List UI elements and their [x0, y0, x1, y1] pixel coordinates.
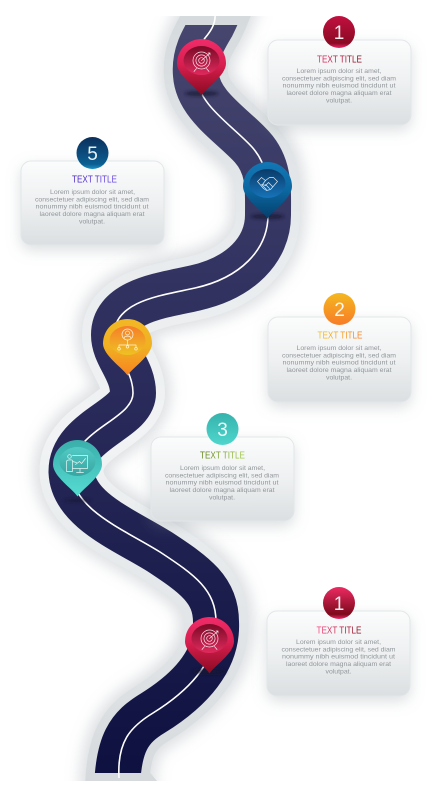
icon: target lower [201, 630, 218, 650]
card 5 body: consectetuer adipiscing elit, sed diam [35, 197, 149, 203]
card 1 lower body: nonummy nibh euismod tincidunt ut [282, 655, 395, 661]
card 5 body: volutpat. [79, 219, 105, 225]
card 1 lower [267, 587, 410, 696]
card 5 [21, 137, 164, 245]
card 3 body: volutpat. [209, 495, 235, 501]
card 3 body: consectetuer adipiscing elit, sed diam [165, 473, 279, 479]
pin 5: target lower [185, 617, 234, 674]
card 3 body: nonummy nibh euismod tincidunt ut [166, 481, 279, 487]
card 1 lower body: Lorem ipsum dolor sit amet, [296, 640, 381, 646]
pin 3: org chart [103, 319, 152, 376]
card 1 body: Lorem ipsum dolor sit amet, [296, 69, 382, 75]
card 2 title: TEXT TITLE [318, 330, 363, 342]
card 1 lower title: TEXT TITLE [316, 626, 362, 636]
card 1 lower body: laoreet dolore magna aliquam erat [286, 662, 391, 668]
badge 1 lower: 1 [334, 594, 344, 615]
badge 3 [206, 413, 238, 445]
card 1 body: consectetuer adipiscing elit, sed diam [282, 76, 396, 82]
card 1 [268, 16, 411, 125]
card 1 title: TEXT TITLE [317, 54, 362, 66]
badge 5 [76, 137, 108, 169]
card 3 body: Lorem ipsum dolor sit amet, [180, 466, 265, 472]
card 2 body: laoreet dolore magna aliquam erat [286, 368, 392, 374]
badge 1: 1 [334, 23, 344, 44]
card 3 body [165, 466, 279, 501]
pin 4: presentation [53, 440, 102, 502]
card 5 body: laoreet dolore magna aliquam erat [40, 212, 145, 218]
card 2 body: consectetuer adipiscing elit, sed diam [282, 353, 396, 359]
card 3 title: TEXT TITLE [200, 450, 245, 462]
card 2 body: volutpat. [326, 375, 352, 381]
card 2 body: Lorem ipsum dolor sit amet, [296, 346, 382, 352]
card 2 body: nonummy nibh euismod tincidunt ut [282, 361, 396, 367]
badge 2: 2 [334, 300, 345, 321]
card 5 title: TEXT TITLE [72, 174, 117, 186]
winding road [71, 0, 268, 795]
icon: handshake [258, 178, 278, 190]
card 1 lower body: volutpat. [326, 669, 352, 675]
card 1 lower body [282, 640, 396, 675]
pin 1: target [177, 39, 226, 96]
card 1 lower body: consectetuer adipiscing elit, sed diam [282, 647, 396, 653]
card 5 body: Lorem ipsum dolor sit amet, [50, 190, 135, 196]
icon: target [193, 52, 210, 72]
card 1 body [282, 69, 396, 104]
card 2 body [282, 346, 396, 381]
badge 5: 5 [87, 144, 98, 165]
card 2 [268, 293, 411, 402]
card 5 body: nonummy nibh euismod tincidunt ut [36, 205, 149, 211]
card 1 body: volutpat. [326, 98, 352, 104]
card 5 body [35, 190, 149, 225]
card 1 body: laoreet dolore magna aliquam erat [286, 91, 392, 97]
card 1 body: nonummy nibh euismod tincidunt ut [282, 84, 396, 90]
pin 2: handshake [243, 162, 292, 219]
badge 2 [324, 293, 356, 325]
badge 1 lower [323, 587, 355, 619]
icon: presentation [66, 455, 88, 472]
badge 3: 3 [217, 420, 228, 441]
card 3 body: laoreet dolore magna aliquam erat [170, 488, 275, 494]
icon: org chart [118, 329, 137, 350]
badge 1 [323, 16, 355, 48]
card 3 [151, 413, 294, 521]
